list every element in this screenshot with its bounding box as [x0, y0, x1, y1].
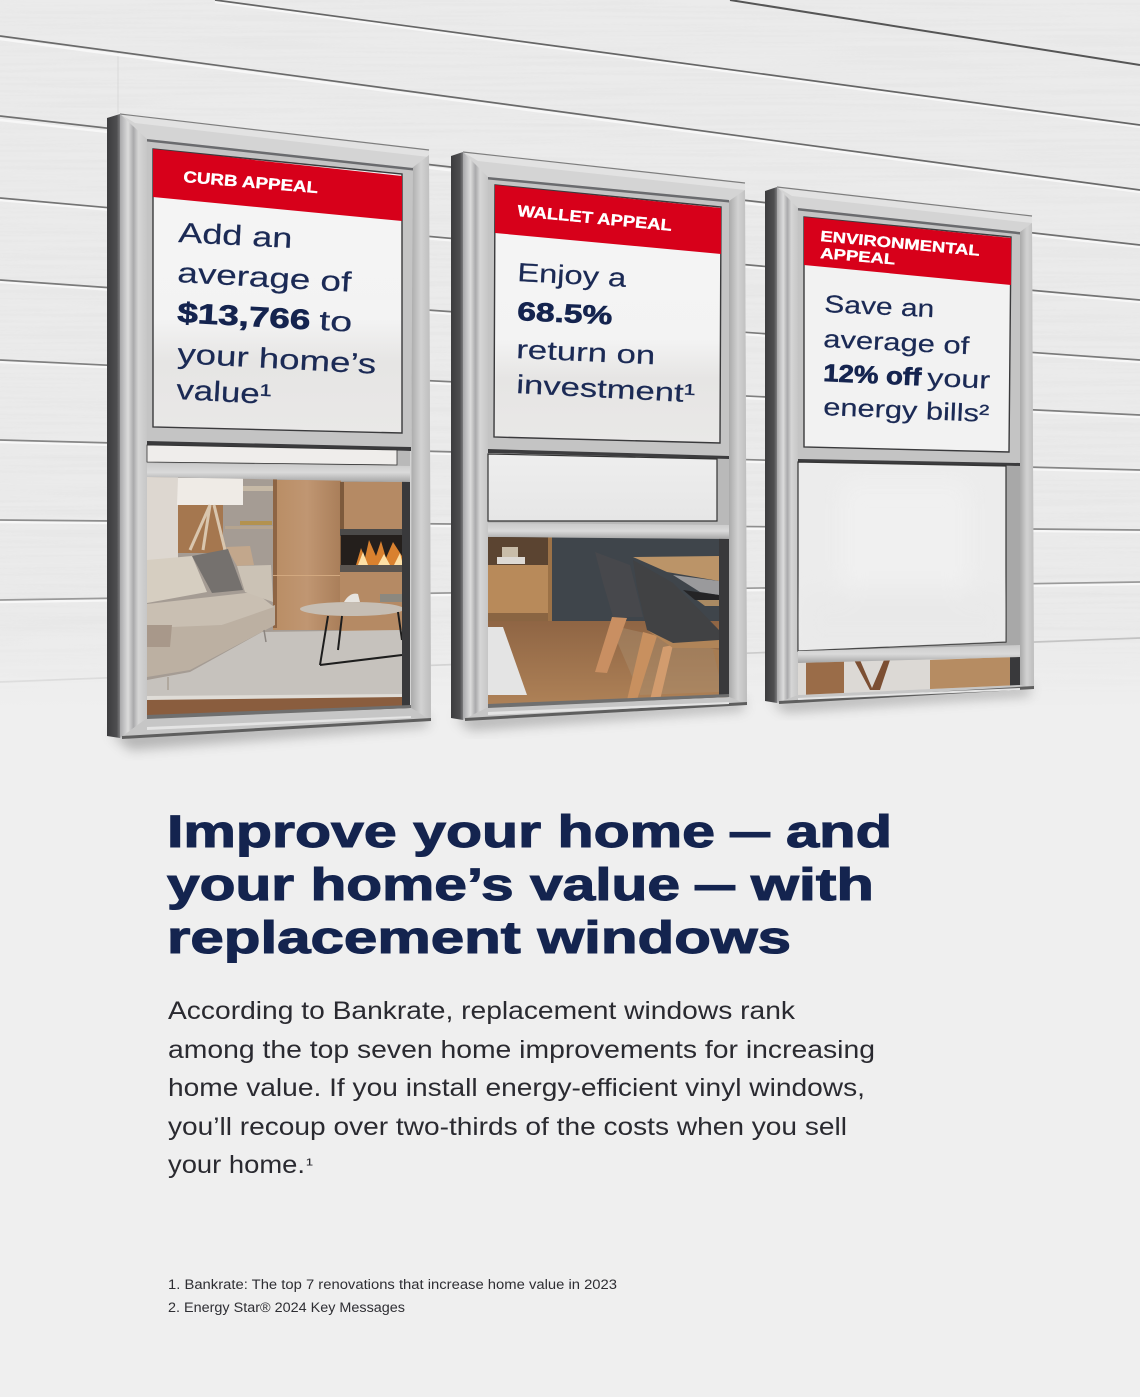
siding wall	[0, 0, 1140, 725]
curb appeal copy: value¹	[176, 374, 272, 410]
wallet appeal banner	[495, 185, 721, 254]
environmental appeal copy	[823, 291, 991, 428]
window: wallet appeal	[451, 152, 747, 721]
window: curb appeal	[107, 114, 431, 739]
environmental appeal copy: Save an	[824, 291, 935, 323]
heading	[167, 806, 892, 963]
heading: Improve your home	[167, 806, 715, 857]
body paragraph	[168, 997, 875, 1179]
dining room photo	[486, 535, 731, 710]
curb appeal copy: your home’s	[177, 338, 377, 380]
curb appeal label: CURB APPEAL	[183, 169, 319, 197]
wallet appeal copy: investment¹	[516, 369, 696, 408]
wallet appeal copy: return on	[516, 334, 656, 370]
environmental appeal label: APPEAL	[820, 245, 896, 269]
body paragraph: According to Bankrate, replacement windows rank	[168, 997, 796, 1025]
heading: —	[695, 859, 735, 910]
body paragraph: ¹	[306, 1155, 313, 1174]
curb appeal copy	[176, 217, 377, 410]
heading: —	[730, 806, 770, 857]
window: environmental appeal	[765, 187, 1034, 704]
footnotes: 2. Energy Star® 2024 Key Messages	[168, 1300, 405, 1315]
environmental appeal label: ENVIRONMENTAL	[820, 228, 981, 260]
environmental appeal copy: your	[927, 365, 991, 395]
body paragraph: among the top seven home improvements for increasing	[168, 1036, 875, 1064]
coffee table	[300, 602, 404, 616]
environmental appeal copy: energy bills²	[823, 394, 990, 428]
sofa	[147, 605, 275, 677]
rug	[147, 630, 402, 697]
environmental appeal banner	[804, 217, 1011, 285]
frosted lower pane	[798, 579, 1006, 651]
heading: with	[750, 859, 874, 910]
environmental appeal label	[820, 228, 981, 269]
heading: your home’s value	[167, 859, 680, 910]
body paragraph: you’ll recoup over two-thirds of the costs when you sell	[168, 1113, 847, 1141]
curb appeal copy: $13,766	[177, 297, 311, 335]
curb appeal copy: average of	[177, 257, 352, 298]
living room photo	[147, 475, 412, 722]
curb appeal banner	[153, 149, 402, 221]
window shadows	[110, 685, 1030, 750]
heading: replacement windows	[167, 912, 791, 963]
body paragraph: home value. If you install energy-efficient vinyl windows,	[168, 1074, 865, 1102]
wallet appeal copy: 68.5%	[517, 296, 613, 330]
wallet appeal label: WALLET APPEAL	[517, 203, 673, 235]
wallet appeal copy	[516, 257, 696, 408]
curb appeal copy: to	[318, 305, 353, 338]
body paragraph: your home.	[168, 1151, 305, 1179]
curb appeal copy: Add an	[178, 217, 293, 254]
environmental appeal copy: average of	[823, 326, 970, 360]
footnotes	[168, 1277, 617, 1315]
dining room glimpse	[798, 657, 1020, 695]
wallet appeal copy: Enjoy a	[517, 257, 628, 293]
heading: and	[786, 806, 892, 857]
footnotes: 1. Bankrate: The top 7 renovations that increase home value in 2023	[168, 1277, 617, 1292]
environmental appeal copy: 12% off	[823, 360, 923, 391]
